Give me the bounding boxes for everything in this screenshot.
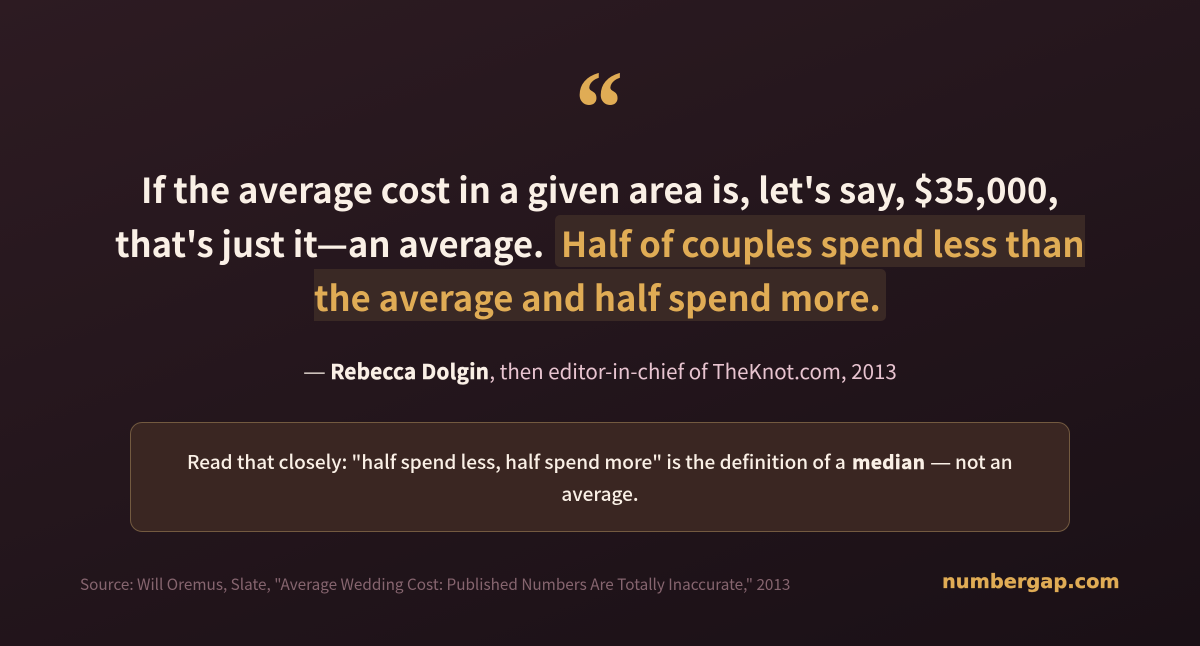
brand: numbergap.com: numbergap.com xyxy=(942,570,1120,593)
callout line 2: average. xyxy=(561,480,639,507)
callout line 1: Read that closely: "half spend less, half spend more" is the definition of a median not an xyxy=(187,448,1013,475)
callout: median note xyxy=(130,422,1070,532)
quote text xyxy=(115,163,1085,321)
icon: opening quotation mark: “ xyxy=(575,49,623,166)
highlight line 2: Half of couples spend less than xyxy=(561,217,1085,267)
quote line 1: If the average cost in a given area is, let's say, $35,000, xyxy=(141,163,1059,213)
attribution: Rebecca Dolgin, then editor-in-chief of TheKnot.com, 2013 xyxy=(330,355,897,385)
highlight line 3: the average and half spend more. xyxy=(314,271,881,321)
quote line 2: that's just it—an average. xyxy=(115,217,544,267)
callout line 1: — xyxy=(930,448,951,475)
source note: Source: Will Oremus, Slate, "Average Wedding Cost: Published Numbers Are Totally Inaccurate," 2013 xyxy=(80,573,790,595)
attribution: — xyxy=(303,355,326,385)
